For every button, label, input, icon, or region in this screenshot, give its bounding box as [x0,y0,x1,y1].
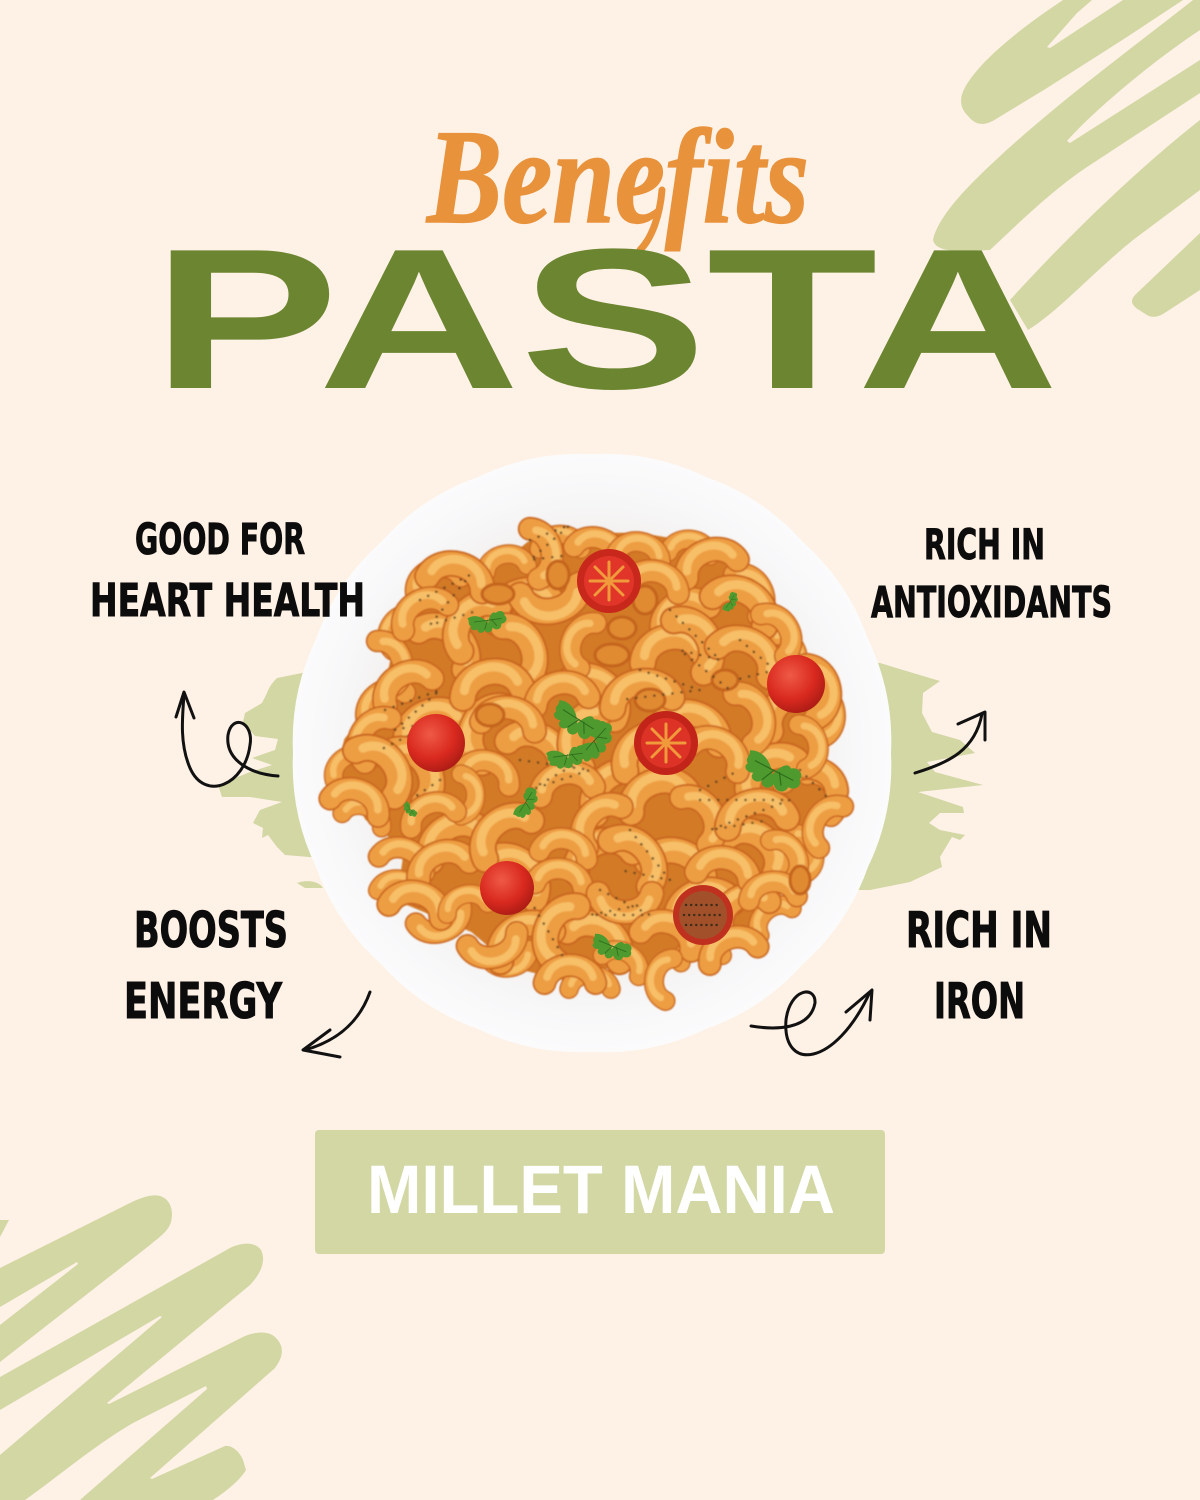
label: boosts energy: ENERGY [124,973,282,1030]
arrow: top left [176,692,278,786]
filler elbows [377,527,841,961]
herb leaves [401,591,805,965]
label: rich in iron [906,902,1052,1030]
arrow: bottom left [303,992,370,1057]
label: good for heart health: HEART HEALTH [90,574,365,627]
plate of pasta [293,454,891,1052]
tomato: cut top [577,549,641,613]
edge elbows [325,531,849,989]
tomato: cut centre [634,711,698,775]
label: rich in iron: RICH IN [906,902,1052,959]
pepper specks [380,525,830,960]
label: rich in antioxidants: RICH IN [924,520,1045,569]
heading: Benefits: Benefits [425,103,809,252]
label: rich in iron: IRON [934,973,1025,1030]
tomato: spiced [673,885,733,945]
brand button: Millet Mania: MILLET MANIA [367,1151,835,1228]
label: boosts energy [124,902,288,1030]
tube ends [476,561,810,894]
tomato: whole left [407,714,465,772]
tomato: whole bottom [480,861,534,915]
label: good for heart health: GOOD FOR [135,515,305,565]
main elbows [330,525,843,1001]
brand button: Millet Mania [315,1130,885,1254]
heading: PASTA: PASTA [152,208,1059,431]
scribble: top right [933,0,1200,330]
tomato: whole right [767,655,825,713]
pasta mound [325,525,849,1001]
green brush blobs behind plate [218,663,983,890]
label: rich in antioxidants [871,520,1112,628]
scribble: bottom left [0,1195,282,1500]
plate [293,454,891,1052]
arrow: bottom right [751,990,872,1055]
label: good for heart health [90,515,365,627]
label: boosts energy: BOOSTS [134,902,288,959]
arrow: top right [915,712,985,773]
